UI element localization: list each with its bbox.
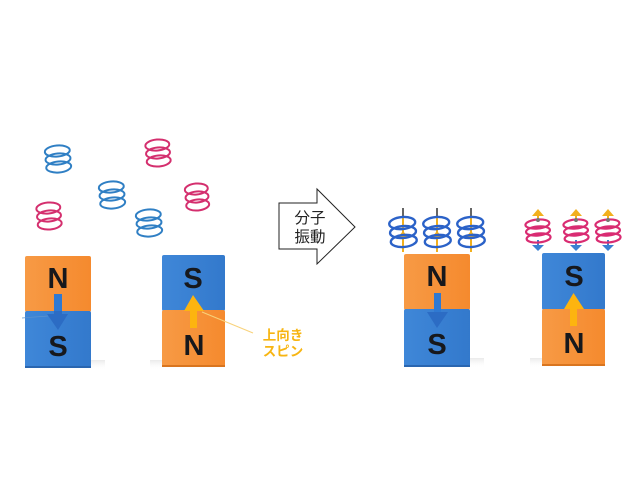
callout: upward spin xyxy=(202,312,303,359)
magnet: fourth pair, S over N xyxy=(530,253,605,368)
magnet: third pair, N over S: N xyxy=(427,261,447,293)
spring: blue 2 xyxy=(98,180,126,210)
spring with spin: 2 xyxy=(423,208,451,252)
magnet: third pair, N over S: S xyxy=(427,329,447,361)
callout: upward spin: 上向き xyxy=(263,327,303,343)
magnet: left pair, N over S xyxy=(22,256,105,370)
springs: blue on N magnet xyxy=(389,208,485,252)
spring: blue 3 xyxy=(135,208,163,238)
spring: blue 1 xyxy=(44,144,72,174)
magnet: second pair, S over N xyxy=(150,255,225,370)
magnet: third pair, N over S xyxy=(404,254,484,368)
arrow: molecular vibration: 分子 xyxy=(294,209,326,227)
springs: pink on S magnet xyxy=(525,209,621,251)
spring with spin: 1 xyxy=(389,208,417,252)
springs: free molecules xyxy=(36,139,210,238)
magnet: second pair, S over N: S xyxy=(183,263,203,295)
spring: pink 1 xyxy=(145,139,171,167)
arrow: molecular vibration: 振動 xyxy=(294,228,326,246)
spring with spin: 3 xyxy=(457,208,485,252)
spring with spins: 1 xyxy=(525,209,551,251)
spring: pink 2 xyxy=(184,183,210,211)
magnet: second pair, S over N: N xyxy=(184,330,204,362)
magnet: left pair, N over S: S xyxy=(48,331,68,363)
spring: pink 3 xyxy=(36,202,62,230)
spring with spins: 2 xyxy=(563,209,589,251)
magnet: fourth pair, S over N: S xyxy=(564,261,584,293)
magnet: fourth pair, S over N: N xyxy=(564,328,584,360)
callout: upward spin: スピン xyxy=(263,344,303,359)
spring with spins: 3 xyxy=(595,209,621,251)
arrow: molecular vibration xyxy=(279,189,355,264)
magnet: left pair, N over S: N xyxy=(48,263,68,295)
